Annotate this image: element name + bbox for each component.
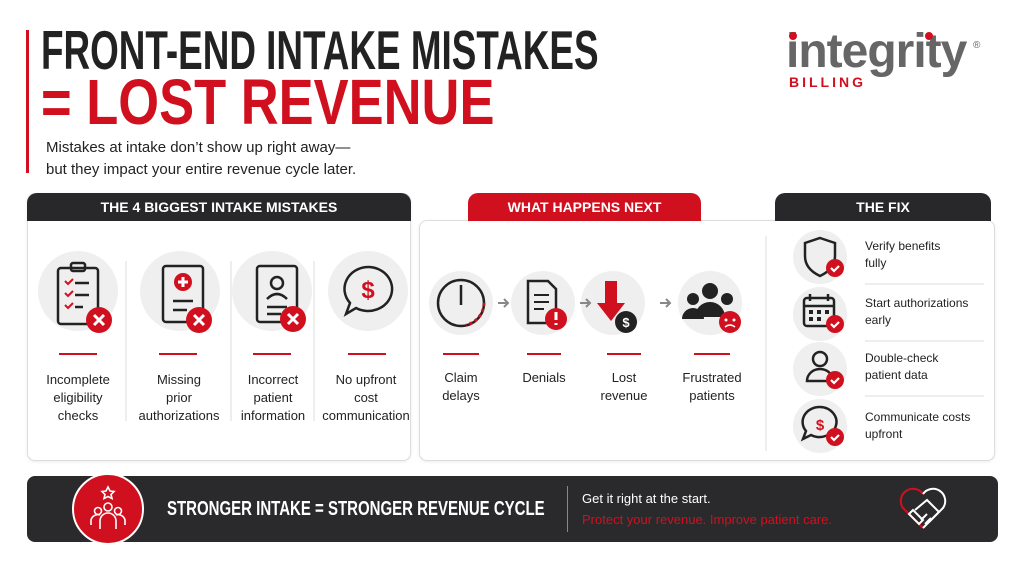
fix: start auth: early <box>865 313 891 327</box>
banner tagline: Protect your revenue. Improve patient care. <box>582 512 832 527</box>
label: incorrect patient info: information <box>241 408 305 423</box>
header: the fix <box>775 193 991 221</box>
label: claim delays: delays <box>442 388 480 403</box>
fix: communicate: Communicate costs <box>865 410 970 424</box>
subtitle: but they impact your entire revenue cycle later. <box>46 161 356 178</box>
banner tagline: Get it right at the start. <box>582 491 711 506</box>
fix: double-check: patient data <box>865 368 928 382</box>
label: missing prior auth <box>139 372 219 423</box>
red lines consequences <box>443 353 479 355</box>
fix: start auth: Start authorizations <box>865 296 968 310</box>
consequences icons: $ <box>816 417 825 434</box>
header: mistakes: THE 4 BIGGEST INTAKE MISTAKES <box>101 199 337 215</box>
icon: team star <box>72 475 144 543</box>
icon: handshake heart <box>900 488 946 529</box>
fix: double-check <box>865 351 938 382</box>
label: no upfront cost: cost <box>354 390 378 405</box>
fix: communicate <box>865 410 970 441</box>
fix: verify: Verify benefits <box>865 239 940 253</box>
consequences icons: $ <box>622 315 630 330</box>
mistakes icons <box>38 251 408 421</box>
label: missing prior auth: prior <box>166 390 192 405</box>
label: frustrated patients <box>682 370 742 403</box>
label: missing prior auth: authorizations <box>139 408 219 423</box>
accent bar <box>26 30 29 173</box>
label: lost revenue: revenue <box>600 388 647 403</box>
label: claim delays: Claim <box>444 370 478 385</box>
banner tagline <box>582 491 832 527</box>
logo: BILLING <box>789 74 866 90</box>
label: incomplete eligibility: Incomplete <box>46 372 110 387</box>
label: lost revenue: Lost <box>612 370 636 385</box>
label: frustrated patients: patients <box>689 388 735 403</box>
label: no upfront cost: No upfront <box>336 372 396 387</box>
label: incorrect patient info: Incorrect <box>248 372 298 387</box>
header: what happens next <box>468 193 701 221</box>
label: incomplete eligibility <box>46 372 110 423</box>
header: what happens next: WHAT HAPPENS NEXT <box>508 199 661 215</box>
label: frustrated patients: Frustrated <box>682 370 742 385</box>
label: no upfront cost: communication <box>322 408 410 423</box>
label: no upfront cost <box>322 372 410 423</box>
label: incomplete eligibility: eligibility <box>53 390 103 405</box>
fix: communicate: upfront <box>865 427 902 441</box>
label: incomplete eligibility: checks <box>58 408 98 423</box>
logo: integrity <box>786 25 966 78</box>
mistakes icons: $ <box>361 277 375 304</box>
label: denials: Denials <box>522 370 566 385</box>
fix: verify: fully <box>865 256 886 270</box>
header: mistakes <box>27 193 411 221</box>
fix: double-check: Double-check <box>865 351 938 365</box>
bottom banner <box>27 476 998 542</box>
panel: 4 biggest mistakes <box>27 193 411 461</box>
title line 2: = LOST REVENUE <box>41 66 494 138</box>
label: incorrect patient info <box>241 372 305 423</box>
label: claim delays <box>442 370 480 403</box>
panel: what happens next + fix <box>419 220 995 461</box>
fix: start auth <box>865 296 968 327</box>
red lines mistakes <box>59 353 97 355</box>
subtitle: Mistakes at intake don’t show up right away— <box>46 139 350 156</box>
subtitle <box>46 139 356 178</box>
label: incorrect patient info: patient <box>253 390 293 405</box>
label: missing prior auth: Missing <box>157 372 201 387</box>
title: FRONT-END INTAKE MISTAKES <box>41 19 599 81</box>
logo: ® <box>973 40 980 51</box>
label: lost revenue <box>600 370 647 403</box>
consequences icons <box>429 230 984 453</box>
header: the fix: THE FIX <box>856 199 910 215</box>
banner headline: STRONGER INTAKE = STRONGER REVENUE CYCLE <box>167 498 545 520</box>
fix: verify <box>865 239 940 270</box>
